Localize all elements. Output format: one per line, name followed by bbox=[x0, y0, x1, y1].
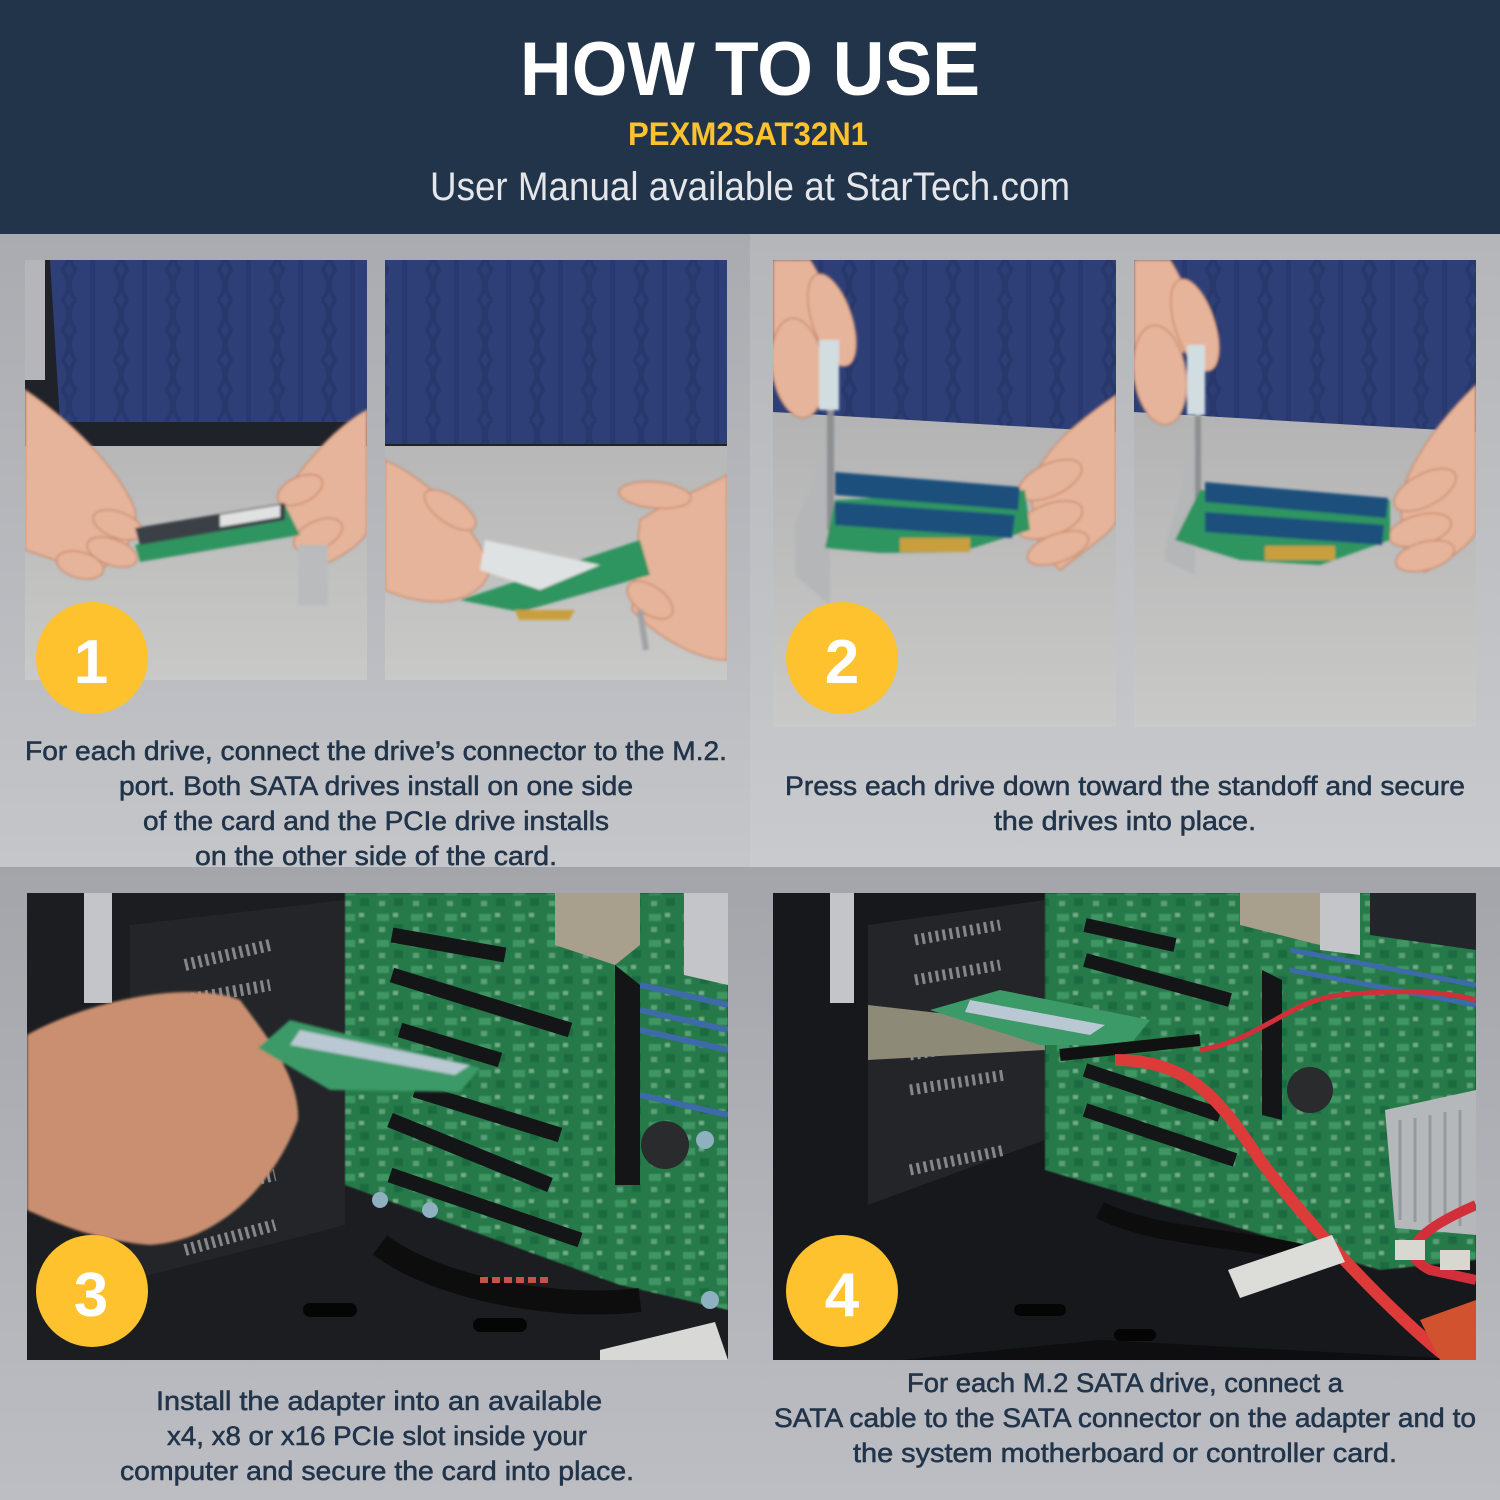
photo: securing drives, second view bbox=[1134, 260, 1476, 575]
instruction text: step 1: port. Both SATA drives install on one side bbox=[119, 771, 633, 801]
instruction text: step 2: Press each drive down toward the standoff and secure bbox=[785, 771, 1465, 801]
photo: connecting drive, front view bbox=[25, 260, 367, 680]
badge: step 4 bbox=[786, 1235, 898, 1347]
photo: connecting SATA cables bbox=[773, 893, 1476, 1360]
manual note: User Manual available at StarTech.com bbox=[430, 165, 1070, 209]
header banner bbox=[0, 0, 1500, 234]
instruction text: step 4: For each M.2 SATA drive, connect a bbox=[907, 1368, 1344, 1398]
instruction text: step 3 bbox=[120, 1386, 634, 1486]
model number: PEXM2SAT32N1 bbox=[628, 116, 868, 152]
instruction text: step 3: x4, x8 or x16 PCIe slot inside your bbox=[167, 1421, 587, 1451]
instruction text: step 1: on the other side of the card. bbox=[195, 841, 557, 871]
photo: securing drives, close view bbox=[773, 260, 1116, 604]
badge: step 2 bbox=[786, 602, 898, 714]
badge: step 3 bbox=[36, 1235, 148, 1347]
instruction text: step 2: the drives into place. bbox=[994, 806, 1256, 836]
instruction text: step 3: Install the adapter into an available bbox=[156, 1386, 602, 1416]
instruction text: step 4 bbox=[774, 1368, 1476, 1468]
instruction text: step 2 bbox=[785, 771, 1465, 836]
panel: step 3 bbox=[0, 867, 750, 1500]
panel: step 1 bbox=[0, 234, 750, 871]
panel: step 2 bbox=[750, 234, 1500, 867]
instruction text: step 4: the system motherboard or controller card. bbox=[853, 1438, 1397, 1468]
instruction text: step 3: computer and secure the card into place. bbox=[120, 1456, 634, 1486]
badge: step 1: 1 bbox=[74, 628, 108, 697]
badge: step 4: 4 bbox=[825, 1261, 860, 1330]
instruction text: step 1 bbox=[25, 736, 727, 871]
badge: step 2: 2 bbox=[825, 628, 859, 697]
photo: installing adapter in PCIe slot bbox=[27, 893, 728, 1360]
title: HOW TO USE bbox=[520, 27, 980, 112]
instruction text: step 1: For each drive, connect the drive’s connector to the M.2. bbox=[25, 736, 727, 766]
panel: step 4 bbox=[750, 867, 1500, 1500]
badge: step 3: 3 bbox=[74, 1261, 108, 1330]
instruction text: step 4: SATA cable to the SATA connector on the adapter and to bbox=[774, 1403, 1476, 1433]
badge: step 1 bbox=[36, 602, 148, 714]
photo: connecting drive, angled view bbox=[385, 260, 727, 680]
instruction text: step 1: of the card and the PCIe drive installs bbox=[143, 806, 609, 836]
